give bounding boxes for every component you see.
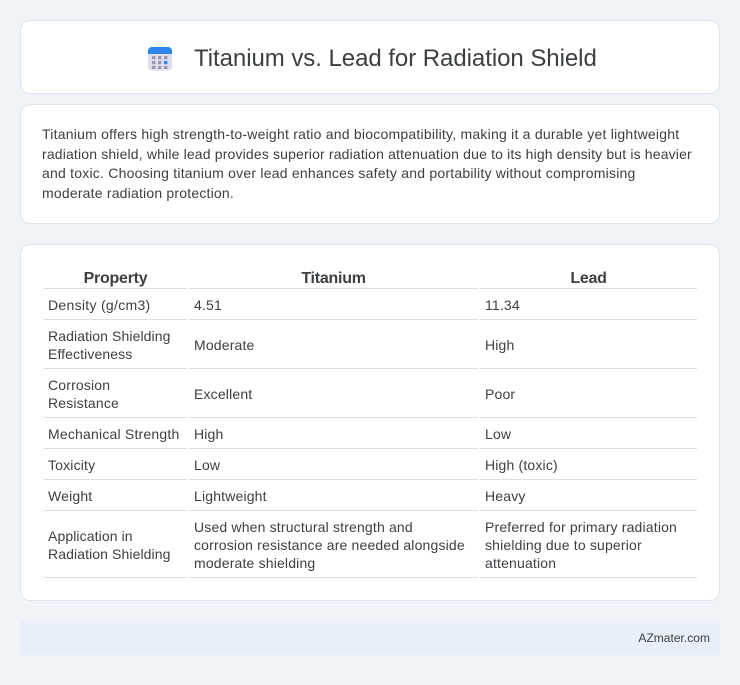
footer bar <box>20 621 720 655</box>
summary paragraph <box>42 126 692 201</box>
row: mechanical strength: Low <box>485 426 511 442</box>
row: corrosion resistance: Excellent <box>194 386 252 402</box>
row: density <box>48 297 520 313</box>
row: radiation shielding effectiveness: High <box>485 337 514 353</box>
row: application in radiation shielding: corrosion resistance are needed alongside <box>194 537 465 553</box>
panel: summary text <box>20 104 720 224</box>
table header: Lead <box>570 270 607 287</box>
row: corrosion resistance: Corrosion <box>48 377 110 393</box>
row: toxicity: Toxicity <box>48 457 95 473</box>
table header: Property <box>84 270 147 287</box>
row: toxicity: Low <box>194 457 220 473</box>
row: radiation shielding effectiveness <box>48 328 514 362</box>
summary paragraph: Titanium offers high strength-to-weight ratio and biocompatibility, making it a durable yet lightweight <box>42 126 679 142</box>
summary paragraph: moderate radiation protection. <box>42 185 234 201</box>
summary paragraph: radiation shield, while lead provides superior radiation attenuation due to its high density but is heavier <box>42 146 692 162</box>
row: application in radiation shielding: moderate shielding <box>194 555 315 571</box>
title: Titanium vs. Lead for Radiation Shield <box>194 45 597 72</box>
row: mechanical strength <box>48 426 511 442</box>
row: mechanical strength: High <box>194 426 223 442</box>
row: application in radiation shielding: Used when structural strength and <box>194 519 413 535</box>
row: density: Density (g/cm3) <box>48 297 151 313</box>
row: application in radiation shielding: attenuation <box>485 555 556 571</box>
row: radiation shielding effectiveness: Moderate <box>194 337 255 353</box>
row: application in radiation shielding <box>48 519 677 571</box>
summary paragraph: and toxic. Choosing titanium over lead enhances safety and portability without compromising <box>42 165 636 181</box>
row: radiation shielding effectiveness: Radiation Shielding <box>48 328 171 344</box>
row: application in radiation shielding: Preferred for primary radiation <box>485 519 677 535</box>
table header: Titanium <box>301 270 366 287</box>
icon: calendar <box>148 47 172 70</box>
row: corrosion resistance <box>48 377 515 411</box>
row: weight: Weight <box>48 488 92 504</box>
panel: title card <box>20 20 720 94</box>
row: density: 11.34 <box>485 297 520 313</box>
row: application in radiation shielding: Application in <box>48 528 133 544</box>
row: toxicity <box>48 457 558 473</box>
row: weight: Lightweight <box>194 488 267 504</box>
row: weight <box>48 488 526 504</box>
row: corrosion resistance: Resistance <box>48 395 119 411</box>
row: mechanical strength: Mechanical Strength <box>48 426 179 442</box>
row: radiation shielding effectiveness: Effectiveness <box>48 346 132 362</box>
row: toxicity: High (toxic) <box>485 457 558 473</box>
row: weight: Heavy <box>485 488 526 504</box>
row: corrosion resistance: Poor <box>485 386 515 402</box>
row: density: 4.51 <box>194 297 222 313</box>
row: application in radiation shielding: Radiation Shielding <box>48 546 171 562</box>
panel: comparison table <box>20 244 720 601</box>
footer credit: AZmater.com <box>638 631 710 645</box>
table header <box>84 270 607 287</box>
row: application in radiation shielding: shielding due to superior <box>485 537 642 553</box>
